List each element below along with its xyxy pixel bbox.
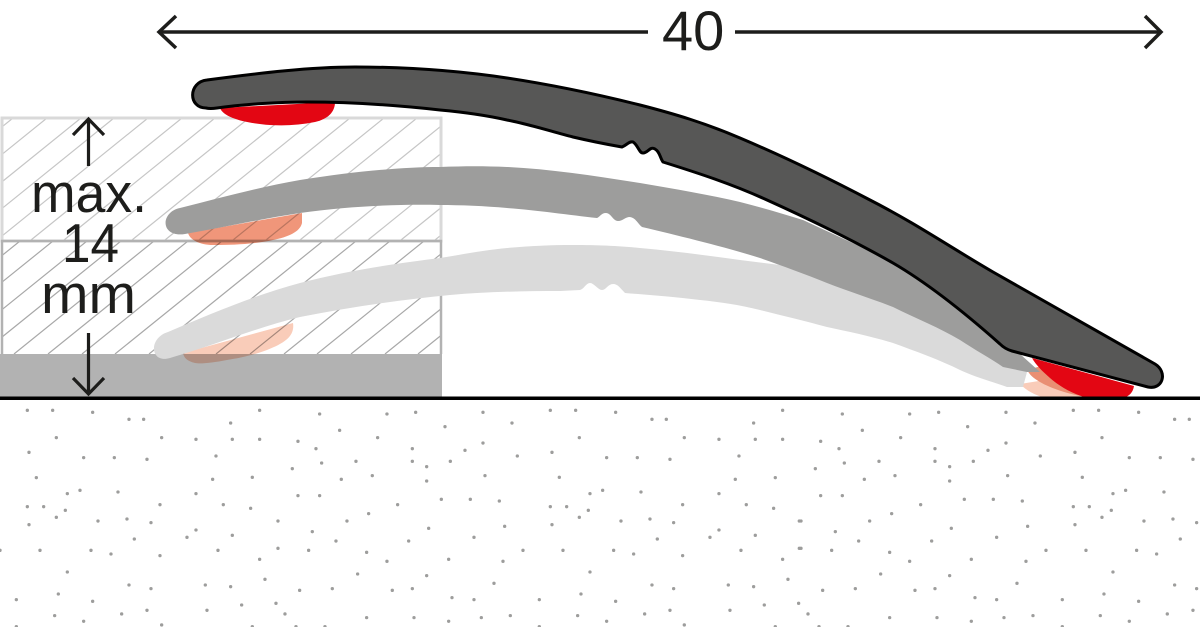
- adhesive: lowest position right: [1020, 380, 1095, 398]
- floor baseline: [0, 396, 1200, 400]
- height label: mm: [41, 263, 136, 325]
- lower hatched layer: [0, 240, 442, 354]
- solid base layer: [0, 354, 442, 397]
- height label: 14: [62, 212, 119, 274]
- adhesive: lowest position left: [183, 323, 293, 363]
- width dimension arrow: [159, 16, 1161, 48]
- speckled subfloor: [0, 410, 1197, 627]
- height label: max.: [31, 162, 147, 224]
- adhesive: top position left: [220, 102, 335, 125]
- stacked floor layers: [0, 116, 442, 396]
- adhesive: top position right: [1032, 358, 1134, 399]
- upper hatched layer: [0, 116, 442, 242]
- height label: [31, 162, 147, 325]
- profile: top position: [193, 67, 1162, 387]
- adhesive: middle position right: [1027, 365, 1095, 398]
- width value: 40: [662, 0, 724, 62]
- profile: lowest position: [154, 245, 1027, 387]
- height dimension arrow down: [73, 333, 104, 394]
- adhesive: middle position left: [188, 213, 302, 245]
- profile: middle position: [166, 166, 1040, 372]
- height dimension arrow up: [73, 119, 104, 166]
